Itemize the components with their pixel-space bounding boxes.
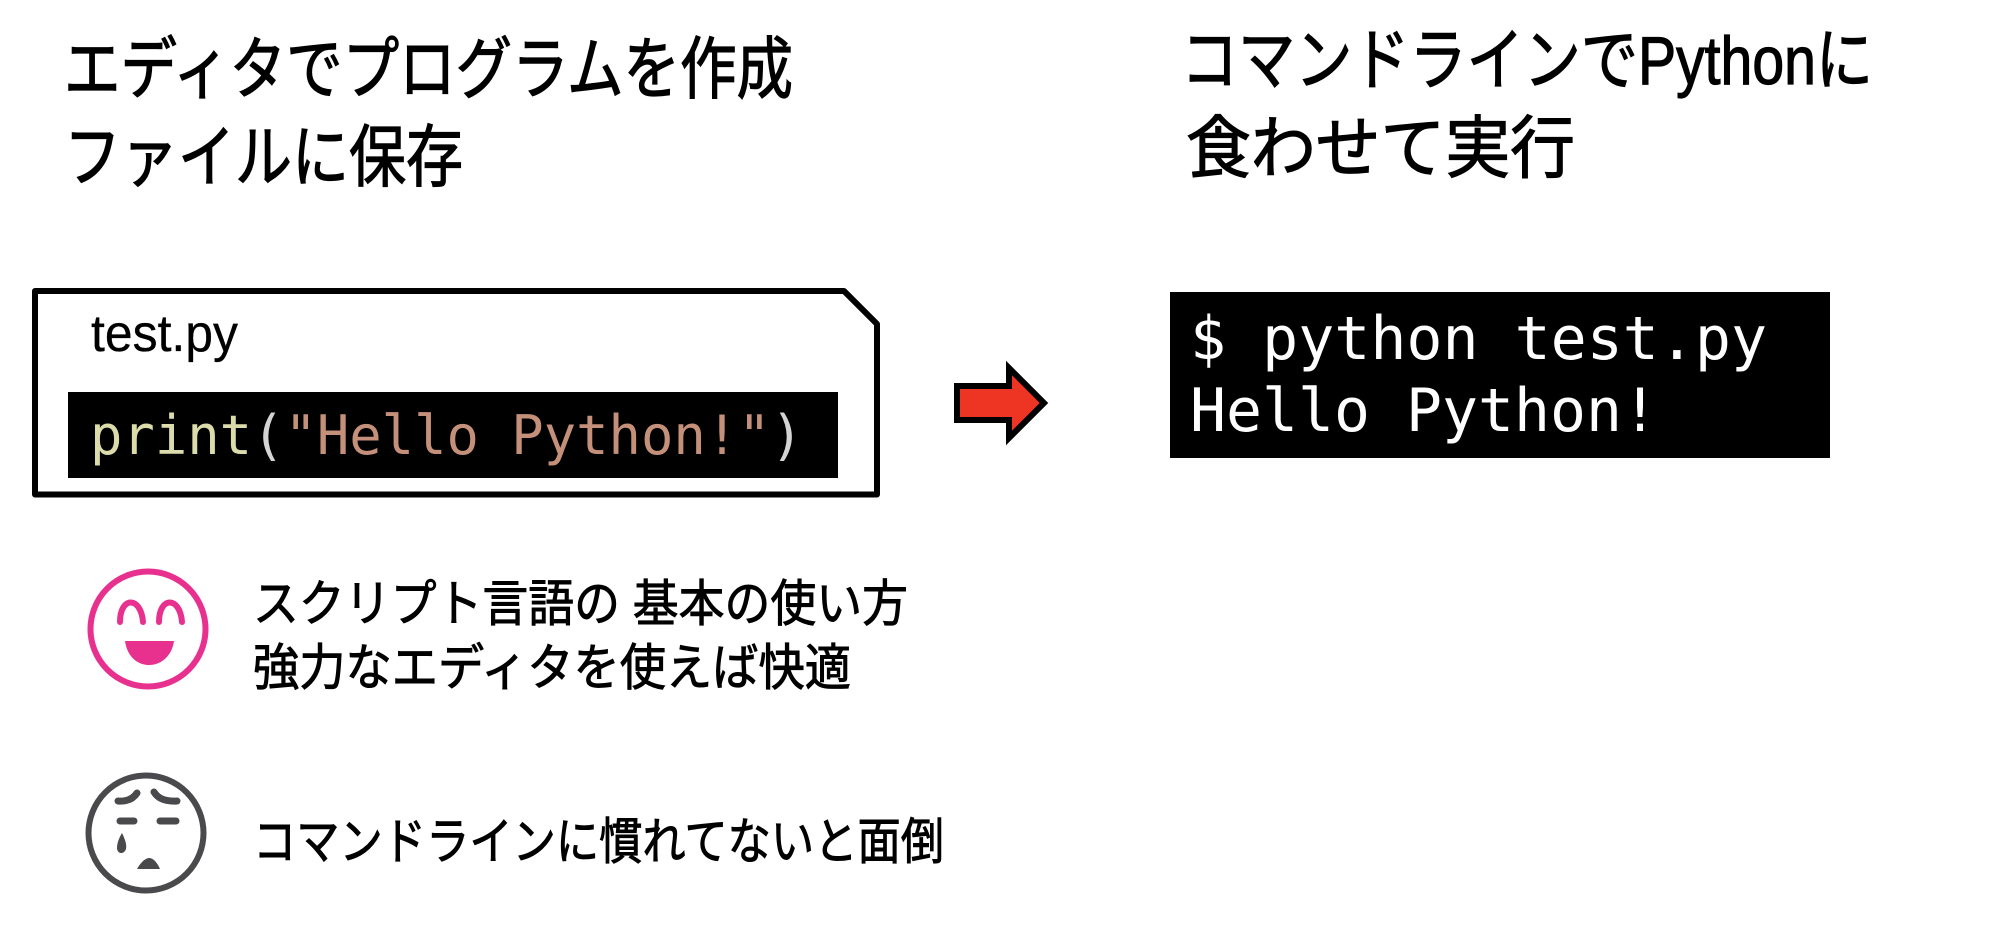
heading: run via command line: 食わせて実行 xyxy=(1186,111,1575,187)
panel: terminal: $ python test.py xyxy=(1190,304,1767,374)
arrow: red right arrow xyxy=(957,368,1044,438)
code block xyxy=(68,392,838,478)
text: pros of scripting: 強力なエディタを使えば快適 xyxy=(253,640,851,696)
code block: print("Hello Python!") xyxy=(90,404,803,467)
heading: create program in editor: エディタでプログラムを作成 xyxy=(64,32,793,108)
text: pros of scripting xyxy=(253,576,908,696)
icon: happy pink face xyxy=(90,572,206,686)
text: cons of command line: コマンドラインに慣れてないと面倒 xyxy=(253,814,944,870)
heading: run via command line: コマンドラインでPythonに xyxy=(1181,23,1873,99)
heading: create program in editor xyxy=(64,32,793,196)
file name: test.py xyxy=(91,305,238,363)
panel: test.py file xyxy=(35,291,877,494)
heading: create program in editor: ファイルに保存 xyxy=(64,120,463,196)
file outline xyxy=(35,291,877,494)
text: pros of scripting: スクリプト言語の 基本の使い方 xyxy=(253,576,908,632)
icon: tired grey face xyxy=(88,776,204,890)
panel: terminal xyxy=(1170,292,1830,458)
panel: terminal: Hello Python! xyxy=(1190,376,1658,446)
heading: run via command line xyxy=(1181,23,1873,187)
